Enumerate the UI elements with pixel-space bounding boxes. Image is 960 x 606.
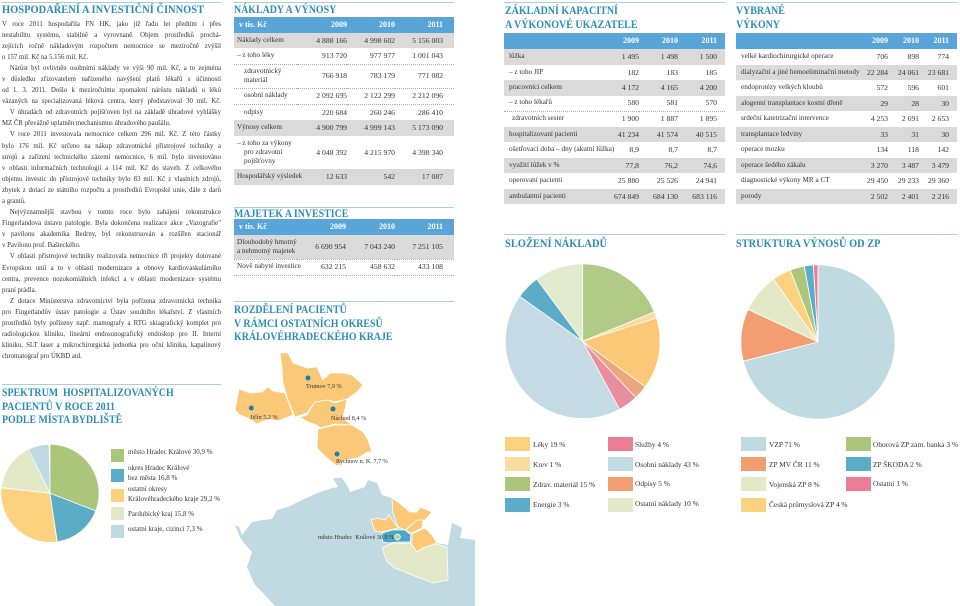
table: kapacitní ukazatele: 1 900 (622, 114, 639, 123)
table: vybrané výkony: 118 (908, 145, 919, 154)
table: kapacitní ukazatele: 77,8 (626, 161, 639, 170)
legend: struktura výnosů: Česká průmyslová ZP 4 % (769, 500, 848, 509)
table: majetek a investice: 632 215 (321, 262, 346, 271)
table: kapacitní ukazatele: 2009 (623, 36, 639, 45)
table: kapacitní ukazatele: 580 (627, 98, 639, 107)
text block: investment narrative: radiologickou kliniku, lineární endosonografický endoskop pro II. Interní (2, 329, 221, 338)
table: vybrané výkony: 2011 (933, 36, 949, 45)
table: kapacitní ukazatele: 76,2 (665, 161, 678, 170)
text block: investment narrative: vázaných na specializovaná léková centra, který představoval 30 mil. Kč. (2, 96, 221, 105)
table: kapacitní ukazatele: 4 165 (661, 83, 678, 92)
map: česko (235, 478, 475, 606)
text block: investment narrative: a grantů. (2, 196, 26, 205)
table: kapacitní ukazatele: 40 515 (696, 130, 717, 139)
table: kapacitní ukazatele: 74,6 (704, 161, 717, 170)
legend: struktura výnosů: Vojenská ZP 8 % (769, 480, 820, 489)
table: náklady a výnosy: 766 918 (322, 71, 347, 80)
table: kapacitní ukazatele: 674 849 (614, 192, 639, 201)
table: vybrané výkony: 898 (907, 52, 919, 61)
heading: složení nákladů: SLOŽENÍ NÁKLADŮ (505, 238, 607, 250)
table: vybrané výkony: 2010 (903, 36, 919, 45)
table: náklady a výnosy: 913 720 (322, 51, 347, 60)
table: kapacitní ukazatele: 8,7 (668, 145, 678, 154)
table: kapacitní ukazatele: 684 130 (653, 192, 678, 201)
legend: složení nákladů: Léky 19 % (533, 440, 565, 449)
table: kapacitní ukazatele: 2011 (701, 36, 717, 45)
legend: složení nákladů: Ostatní náklady 10 % (635, 499, 699, 508)
table: náklady a výnosy: 4 888 166 (316, 36, 347, 45)
table: kapacitní ukazatele: ambulantní pacienti (509, 192, 566, 200)
text block: investment narrative: Nárůst byl ovlivněn osobními náklady ve výši 90 mil. Kč, a to zejména (10, 63, 221, 72)
text block: investment narrative: o 157 mil. Kč na 5.156 mil. Kč. (2, 52, 88, 61)
text block: investment narrative: kliniku, SLT laser a mikrochirurgická jednotka pro oční kliniku, kapalinový (2, 340, 221, 349)
text block: investment narrative: zejících ročně nákladovým rozpočtem nemocnice se meziročně zvýšil (2, 41, 221, 50)
text block: investment narrative (2, 18, 221, 360)
table: kapacitní ukazatele: 570 (705, 98, 717, 107)
heading: vybrané výkony: VYBRANÉ (736, 5, 785, 17)
table: kapacitní ukazatele: 41 574 (657, 130, 678, 139)
table: kapacitní ukazatele: 8,9 (629, 145, 639, 154)
text block: investment narrative: prostředků byly pořízeny např. mamografy a RTG skiagrafický komplet pro (2, 318, 221, 327)
heading: spektrum: PACIENTŮ V ROCE 2011 (2, 401, 115, 413)
table: náklady a výnosy: 2010 (379, 20, 395, 29)
heading: rozdělení pacientů: V RÁMCI OSTATNÍCH OKRESŮ (234, 318, 383, 330)
table: kapacitní ukazatele: hospitalizovaní pacienti (509, 130, 577, 138)
map label: Náchod: Náchod 8,4 % (331, 414, 366, 422)
legend: složení nákladů: Osobní náklady 43 % (635, 460, 699, 469)
text block: investment narrative: Fingerlandova ústavu patologie. Byla dokončena realizace akce „Vazografie" (2, 218, 221, 227)
heading: náklady a výnosy: NÁKLADY A VÝNOSY (234, 4, 336, 16)
text block: investment narrative: v pavilonu akademika Bedrny, byl rekonstruován a rozšířen stacionář (2, 229, 221, 238)
table: kapacitní ukazatele: 2010 (662, 36, 678, 45)
table: kapacitní ukazatele: 24 941 (696, 176, 717, 185)
table: vybrané výkony: 774 (937, 52, 949, 61)
table: kapacitní ukazatele: 1 498 (661, 52, 678, 61)
table: majetek a investice: 7 251 105 (412, 242, 443, 251)
text block: investment narrative: MZ ČR převážně uplatněn mechanismus úhradového paušálu. (2, 118, 171, 127)
table: náklady a výnosy: pro zdravotní (244, 148, 283, 156)
table: vybrané výkony: 30 (941, 99, 949, 108)
legend: struktura výnosů: ZP ŠKODA 2 % (873, 460, 922, 469)
legend: spektrum: ostatní okresy (128, 485, 167, 493)
legend: složení nákladů: Energie 3 % (533, 500, 569, 509)
heading: základní kapacitní: A VÝKONOVÉ UKAZATELE (505, 19, 637, 31)
legend: složení nákladů: Odpisy 5 % (635, 479, 670, 488)
table: náklady a výnosy: 771 082 (418, 71, 443, 80)
table: vybrané výkony: 28 (911, 99, 919, 108)
map label: Hradec Králové: město Hradec Králové 30,9 % (318, 534, 394, 540)
text block: investment narrative: od 1. 3. 2011. Došlo k meziročnímu zpomalení nárůstu nákladů u léků (2, 85, 221, 94)
heading: majetek a investice: MAJETEK A INVESTICE (234, 208, 348, 220)
table: náklady a výnosy: v tis. Kč (239, 20, 267, 29)
heading: hospodaření: HOSPODAŘENÍ A INVESTIČNÍ ČINNOST (2, 4, 204, 16)
table: vybrané výkony: dialyzační a jiné hemoeliminační metody (741, 68, 860, 76)
table: náklady a výnosy: 977 977 (370, 51, 395, 60)
table: náklady a výnosy: 260 246 (370, 108, 395, 117)
table: náklady a výnosy: 4 999 143 (364, 123, 395, 132)
table: náklady a výnosy: odpisy (244, 108, 263, 116)
table: vybrané výkony: porody (741, 192, 761, 200)
pie chart: spektrum pacientů (1, 444, 99, 542)
legend: struktura výnosů: Oborová ZP zam. banka 3 % (873, 440, 958, 449)
table: náklady a výnosy: 286 410 (418, 108, 443, 117)
table: náklady a výnosy: 1 001 043 (412, 51, 443, 60)
heading: struktura výnosů: STRUKTURA VÝNOSŮ OD ZP (736, 238, 880, 250)
table: kapacitní ukazatele: lůžka (509, 52, 525, 60)
table: vybrané výkony: endoprotézy velkých kloubů (741, 83, 823, 91)
legend: spektrum: bez města 16,8 % (128, 474, 177, 482)
table: vybrané výkony: diagnostické výkony MR a CT (741, 176, 830, 184)
table: vybrané výkony: 142 (937, 145, 949, 154)
legend: struktura výnosů: VZP 71 % (769, 440, 800, 449)
table: náklady a výnosy: 5 156 003 (412, 36, 443, 45)
panel: rozdělení pacientů heading (234, 301, 454, 343)
legend: struktura výnosů: Ostatní 1 % (873, 479, 908, 488)
table: majetek a investice: 2009 (330, 222, 346, 231)
table: vybrané výkony: 29 233 (898, 176, 919, 185)
table: náklady a výnosy: 4 998 602 (364, 36, 395, 45)
table: vybrané výkony: 2 691 (902, 114, 919, 123)
table: vybrané výkony: 572 (876, 83, 888, 92)
table: kapacitní ukazatele (504, 33, 725, 204)
table: vybrané výkony: operace šedého zákalu (741, 161, 806, 169)
table: náklady a výnosy: 220 684 (322, 108, 347, 117)
map label: Jičín: Jičín 5,2 % (250, 414, 278, 420)
table: vybrané výkony: 596 (907, 83, 919, 92)
map label: Trutnov: Trutnov 7,9 % (306, 382, 342, 390)
text block: investment narrative: pro Fingerlandův ústav patologie a Ústav soudního lékařství. Z vlastních (2, 307, 221, 316)
table: kapacitní ukazatele: 581 (666, 98, 678, 107)
heading: rozdělení pacientů (234, 302, 393, 343)
table: vybrané výkony: 3 479 (932, 161, 949, 170)
heading: rozdělení pacientů: ROZDĚLENÍ PACIENTŮ (234, 304, 347, 316)
table: náklady a výnosy: – z toho léky (237, 51, 274, 59)
heading: spektrum (2, 386, 174, 426)
text block: investment narrative: V oblasti přístrojové techniky realizovala nemocnice tři projekty dotované (10, 251, 221, 260)
legend: spektrum: Pardubický kraj 15,8 % (128, 510, 194, 518)
table: náklady a výnosy (234, 17, 454, 185)
table: majetek a investice: Nově nabyté investice (237, 262, 301, 270)
table: vybrané výkony: transplantace ledviny (741, 130, 802, 138)
table: náklady a výnosy: materiál (244, 76, 268, 84)
table: kapacitní ukazatele: 1 895 (700, 114, 717, 123)
legend: struktura výnosů: ZP MV ČR 11 % (769, 460, 820, 469)
map label: Rychnov: Rychnov n. K. 7,7 % (336, 458, 388, 464)
table: vybrané výkony: 3 270 (871, 161, 888, 170)
text block: investment narrative: Nejvýznamnější stavbou v tomto roce bylo zahájení rekonstrukce (10, 207, 221, 216)
table: kapacitní ukazatele: – z toho lékařů (509, 98, 552, 106)
text block: investment narrative: V roce 2011 hospodařila FN HK, jako již řadu let předtím i přes (2, 18, 221, 28)
table: vybrané výkony: 2009 (872, 36, 888, 45)
table: náklady a výnosy: 12 633 (326, 172, 347, 181)
heading: spektrum: SPEKTRUM HOSPITALIZOVANÝCH (2, 387, 174, 399)
map: okres Rychnov (317, 425, 372, 466)
legend: spektrum (111, 448, 220, 538)
table: vybrané výkony: 2 502 (871, 192, 888, 201)
table: náklady a výnosy: 2011 (427, 20, 443, 29)
legend: složení nákladů: Zdrav. materiál 15 % (533, 480, 595, 489)
table: vybrané výkony: 31 (911, 130, 919, 139)
table: kapacitní ukazatele: 182 (627, 68, 639, 77)
heading: základní kapacitní (505, 4, 637, 31)
table: vybrané výkony: 601 (937, 83, 949, 92)
table: náklady a výnosy: Výnosy celkem (237, 123, 282, 131)
legend: složení nákladů (505, 437, 699, 512)
heading: vybrané výkony (736, 4, 785, 31)
table: kapacitní ukazatele: 41 234 (618, 130, 639, 139)
table: vybrané výkony: 706 (876, 52, 888, 61)
table: kapacitní ukazatele: 8,7 (707, 145, 717, 154)
table: náklady a výnosy: zdravotnický (244, 67, 282, 75)
text block: investment narrative: V roce 2011 investovala nemocnice celkem 296 mil. Kč. Z této částky (10, 129, 221, 138)
table: kapacitní ukazatele: operovaní pacienti (509, 176, 562, 184)
text block: investment narrative: strojů a zařízení technického zázemí nemocnice, 6 mil. bylo investováno (2, 152, 221, 161)
table: náklady a výnosy: 5 173 090 (412, 123, 443, 132)
table: náklady a výnosy: 2 212 096 (412, 91, 443, 100)
legend: spektrum: Královéhradeckého kraje 29,2 % (128, 495, 220, 503)
table: majetek a investice: Dlouhodobý hmotný (237, 238, 297, 246)
table: náklady a výnosy: 783 179 (370, 71, 395, 80)
heading: vybrané výkony: VÝKONY (736, 19, 780, 31)
table: kapacitní ukazatele: využití lůžek v % (509, 161, 560, 169)
table: vybrané výkony: 2 216 (932, 192, 949, 201)
table: vybrané výkony: 29 360 (928, 176, 949, 185)
table: kapacitní ukazatele: 4 200 (700, 83, 717, 92)
table: kapacitní ukazatele: 185 (705, 68, 717, 77)
table: vybrané výkony: 4 253 (871, 114, 888, 123)
table: majetek a investice: v tis. Kč (239, 222, 267, 231)
table: náklady a výnosy: 2 122 299 (364, 91, 395, 100)
map: okres Náchod (300, 399, 352, 428)
panel: majetek a investice (234, 207, 454, 276)
text block: investment narrative: chromatograf pro ÚKBD atd. (2, 351, 82, 360)
table: kapacitní ukazatele: 4 172 (622, 83, 639, 92)
table: vybrané výkony: srdeční katetrizační intervence (741, 114, 829, 122)
text block: investment narrative: nestabilitu systému, stabilně a vyrovnaně. Objem prostředků prochá- (2, 30, 221, 39)
table: náklady a výnosy: 542 (383, 172, 395, 181)
table: kapacitní ukazatele: – z toho JIP (509, 68, 543, 76)
text block: investment narrative: Z dotace Ministerstva zdravotnictví byla pořízena zdravotnická technika (10, 296, 221, 305)
text block: investment narrative: centra, prevence nozokomiálních infekcí a v oblasti modernizace systému (2, 274, 221, 283)
map: okres Trutnov (280, 353, 363, 417)
table: vybrané výkony: 2 401 (902, 192, 919, 201)
table: kapacitní ukazatele: 25 526 (657, 176, 678, 185)
table: náklady a výnosy: Hospodářský výsledek (237, 172, 302, 180)
table: náklady a výnosy: 2009 (331, 20, 347, 29)
table: náklady a výnosy: 4 048 392 (316, 148, 347, 157)
table: majetek a investice: 458 632 (370, 262, 395, 271)
table: kapacitní ukazatele: ošetřovací doba – dny (akutní lůžka) (509, 145, 614, 153)
table: vybrané výkony: operace mozku (741, 145, 785, 153)
table: majetek a investice: 7 043 240 (364, 242, 395, 251)
text block: investment narrative: praní prádla. (2, 285, 36, 294)
table: vybrané výkony: 3 487 (902, 161, 919, 170)
table: vybrané výkony: 22 284 (867, 68, 888, 77)
table: vybrané výkony: 29 (880, 99, 888, 108)
heading: rozdělení pacientů: KRÁLOVÉHRADECKÉHO KRAJE (234, 331, 393, 343)
table: kapacitní ukazatele: 1 887 (661, 114, 678, 123)
legend: spektrum: okres Hradec Králové (128, 464, 189, 472)
legend: spektrum: ostatní kraje, cizinci 7,3 % (128, 525, 203, 533)
table: vybrané výkony: 30 (941, 130, 949, 139)
table: kapacitní ukazatele: zdravotních sester (512, 114, 564, 122)
map: city dots (249, 376, 340, 456)
panel: vybrané výkony (736, 2, 957, 204)
legend: složení nákladů: Služby 4 % (635, 440, 669, 449)
table: vybrané výkony: 23 681 (928, 68, 949, 77)
heading: základní kapacitní: ZÁKLADNÍ KAPACITNÍ (505, 5, 618, 17)
table: majetek a investice: 2011 (427, 222, 443, 231)
table: vybrané výkony: alogenní transplantace kostní dřeně (741, 99, 843, 107)
table: kapacitní ukazatele: 25 880 (618, 176, 639, 185)
table: náklady a výnosy: Náklady celkem (237, 36, 284, 44)
table: náklady a výnosy: osobní náklady (244, 91, 288, 99)
table: majetek a investice: 6 690 954 (315, 242, 346, 251)
table: kapacitní ukazatele: 1 500 (700, 52, 717, 61)
text block: investment narrative: bylo 176 mil. Kč určeno na nákup zdravotnické přístrojové techniky a (2, 141, 221, 150)
table: kapacitní ukazatele: 1 495 (622, 52, 639, 61)
table: náklady a výnosy: 4 900 799 (316, 123, 347, 132)
panel: základní kapacitní a výkonové ukazatele (504, 2, 725, 204)
table: náklady a výnosy: pojišťovny (244, 157, 275, 165)
legend: složení nákladů: Krev 1 % (533, 460, 561, 469)
table: vybrané výkony: 33 (880, 130, 888, 139)
table: majetek a investice: 433 108 (418, 262, 443, 271)
legend: spektrum: město Hradec Králové 30,9 % (128, 448, 213, 456)
map: okres Jičín (235, 387, 293, 424)
table: vybrané výkony (736, 33, 957, 204)
table: náklady a výnosy: 4 398 340 (412, 148, 443, 157)
table: vybrané výkony: 24 061 (898, 68, 919, 77)
text block: investment narrative: v Pavilonu prof. Bašteckého. (2, 240, 81, 249)
text block: investment narrative: Evropskou unií a to v oblasti modernizace a obnovy kardiovaskulárního (2, 263, 221, 272)
table: vybrané výkony: 134 (876, 145, 888, 154)
table: vybrané výkony: velké kardiochirurgické operace (741, 52, 833, 60)
text block: investment narrative: zbytek z dotací ze státního rozpočtu a prostředků Evropské unie, dále z darů (2, 185, 221, 194)
table: majetek a investice: 2010 (379, 222, 395, 231)
text block: investment narrative: v důsledku zřizovatelem nařízeného navýšení platů lékařů s účinností (2, 74, 221, 83)
table: majetek a investice (234, 219, 454, 276)
table: vybrané výkony: 29 450 (867, 176, 888, 185)
table: vybrané výkony: 2 653 (932, 114, 949, 123)
panel: náklady a výnosy (234, 2, 454, 185)
table: kapacitní ukazatele: pracovníci celkem (509, 83, 562, 91)
heading: spektrum: PODLE MÍSTA BYDLIŠTĚ (2, 414, 122, 426)
table: náklady a výnosy: – z toho za výkony (237, 139, 292, 147)
text block: investment narrative: V úhradách od zdravotních pojišťoven byl na základě úhradové vyhlášky (10, 107, 221, 116)
panel: hospodaření a investiční činnost (2, 2, 221, 360)
table: náklady a výnosy: 4 215 970 (364, 148, 395, 157)
text block: investment narrative: v oblasti informačních technologií a 114 mil. Kč do staveb. Z celkového (2, 163, 221, 172)
table: kapacitní ukazatele: 183 (666, 68, 678, 77)
table: náklady a výnosy: 17 087 (422, 172, 443, 181)
panel: spektrum hospitalizovaných pacientů (2, 384, 221, 538)
table: majetek a investice: a nehmotný majetek (237, 247, 295, 255)
text block: investment narrative: objemu investic do přístrojové techniky bylo 83 mil. Kč z vlastních zdrojů, (2, 174, 221, 183)
table: kapacitní ukazatele: 683 116 (692, 192, 717, 201)
table: náklady a výnosy: 2 092 695 (316, 91, 347, 100)
